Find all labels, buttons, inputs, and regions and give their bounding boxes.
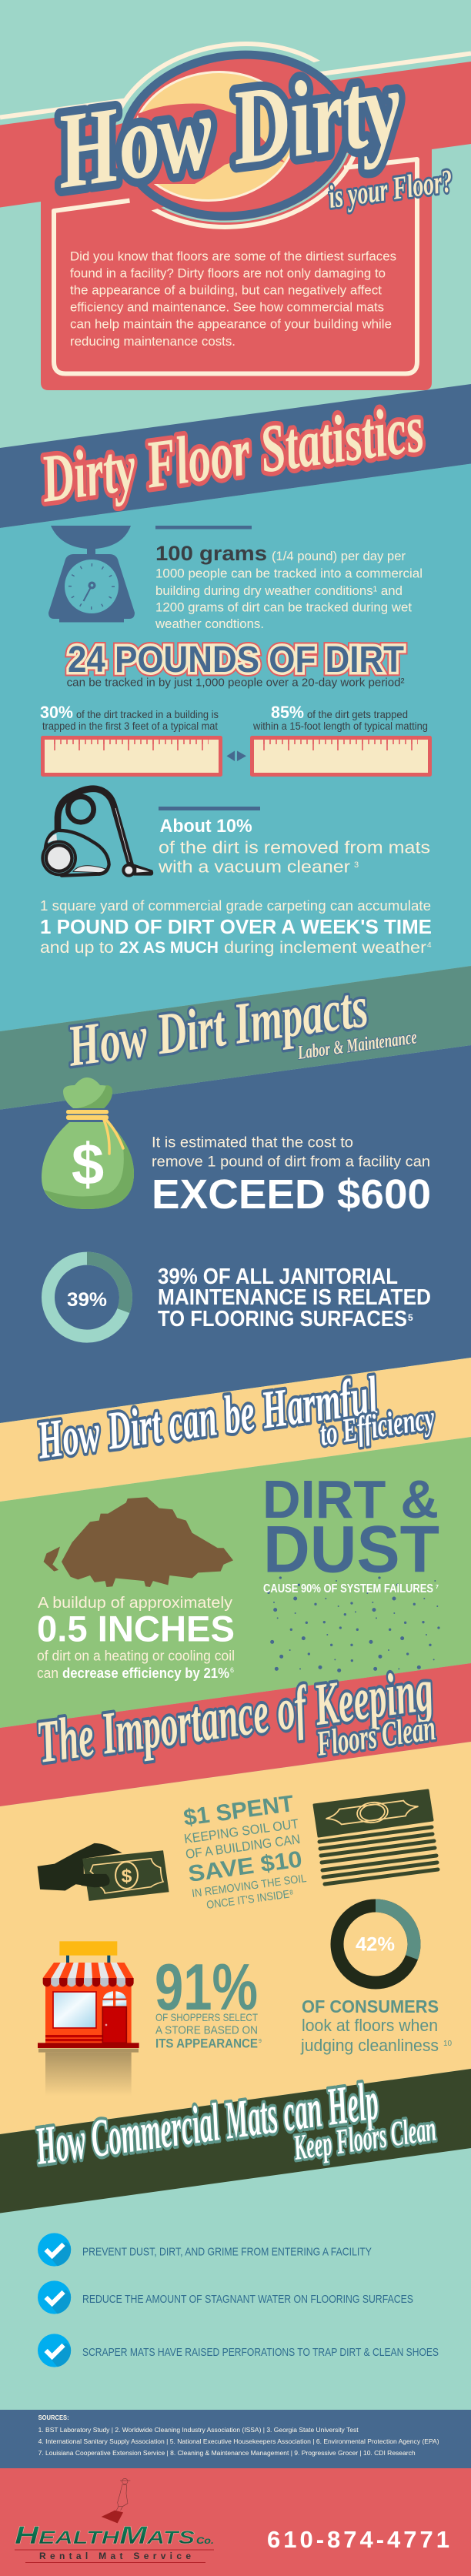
stat: about 10%: 3 <box>354 860 359 870</box>
phone number: 610-874-4771 <box>267 2526 449 2553</box>
stat: of consumers: judging cleanliness <box>300 2036 439 2055</box>
panel: harmful to efficiency <box>0 1358 471 1728</box>
icon: check 3 <box>38 2334 71 2367</box>
stat: 85% <box>252 703 428 732</box>
sources text: 7. Louisiana Cooperative Extension Service | 8. Cleaning & Maintenance Management | 9. Progressive Grocer | 10. CDI Research <box>38 2450 416 2457</box>
stat: 24 pounds of dirt: 24 POUNDS OF DIRT <box>68 640 404 680</box>
stat: 100 grams: weather condtions. <box>155 617 264 631</box>
stat: carpeting <box>40 898 432 957</box>
arrows between rulers <box>226 751 246 761</box>
icon: money bag: $ <box>72 1132 104 1198</box>
caption: 24 pounds: can be tracked in by just 1,000 people over a 20-day work period² <box>67 677 405 690</box>
sources text: SOURCES: <box>38 2414 69 2421</box>
icon: hand holding dollar: $ <box>122 1866 132 1886</box>
stat: carpeting: 4 <box>427 941 432 950</box>
intro text <box>70 249 396 349</box>
sources text: 1. BST Laboratory Study | 2. Worldwide Cleaning Industry Association (ISSA) | 3. Georgia State University Test <box>38 2427 359 2434</box>
stat: 30% <box>40 703 219 732</box>
logo: HealthMats: Co. <box>196 2535 214 2546</box>
sources text <box>38 2414 439 2457</box>
heading: dirt & dust <box>262 1469 439 1587</box>
stat: carpeting: and up to <box>40 939 114 957</box>
stat: $1 spent: KEEPING SOIL OUT <box>183 1816 299 1846</box>
stat: 0.5 inches: 6 <box>230 1666 234 1674</box>
panel: how commercial mats can help <box>0 2069 471 2410</box>
emblem <box>115 42 356 229</box>
logo: HealthMats <box>15 2478 214 2563</box>
navy heading band <box>0 384 471 528</box>
stat: 100 grams: 1000 people can be tracked into a commercial <box>155 567 423 581</box>
check item 3 <box>38 2334 439 2367</box>
panel: sources <box>0 2410 471 2468</box>
stat: 91%: OF SHOPPERS SELECT <box>155 2011 258 2023</box>
caption: 90% system failures: 7 <box>436 1585 439 1590</box>
accent bar <box>159 807 260 810</box>
stat: 30%: 30% <box>40 703 73 722</box>
red ribbon and intro box <box>0 62 471 390</box>
stat: 24 pounds of dirt: 24 POUNDS OF DIRT <box>68 640 404 680</box>
stat: 100 grams: (1/4 pound) per day per <box>272 550 406 563</box>
panel: dirty floor statistics <box>0 384 471 1031</box>
intro text: efficiency and maintenance. See how commercial mats <box>70 300 384 314</box>
stat: 0.5 inches: can <box>37 1666 58 1681</box>
stat: 91%: 91% <box>155 1951 258 2024</box>
stat: 39% janitorial: MAINTENANCE IS RELATED <box>158 1285 431 1310</box>
cream ribbon line <box>0 54 471 117</box>
stat: about 10%: About 10% <box>160 816 252 837</box>
stat: $1 spent: OF A BUILDING CAN <box>185 1832 301 1862</box>
stat: of consumers: 10 <box>443 2040 453 2048</box>
check item 1: PREVENT DUST, DIRT, AND GRIME FROM ENTERING A FACILITY <box>82 2246 372 2258</box>
stat: $1 spent: IN REMOVING THE SOIL <box>191 1873 307 1900</box>
teal section background <box>0 463 471 1031</box>
check item 2: REDUCE THE AMOUNT OF STAGNANT WATER ON FLOORING SURFACES <box>82 2294 413 2306</box>
icon: dust particles <box>269 1578 439 1670</box>
red heading band <box>0 1663 471 1806</box>
heading: dirt & dust: DIRT & <box>262 1469 439 1529</box>
intro text: reducing maintenance costs. <box>70 335 236 349</box>
chart: 42% donut <box>337 1906 414 1983</box>
stat: 0.5 inches: A buildup of approximately <box>38 1594 233 1612</box>
stat: 85%: within a 15-foot length of typical matting <box>252 720 428 732</box>
stat: 100 grams <box>155 542 423 631</box>
stat: 91% <box>155 1951 262 2050</box>
ruler: right <box>252 737 429 774</box>
dark olive heading band <box>0 2069 471 2213</box>
sources text: 4. International Sanitary Supply Association | 5. National Executive Housekeepers Association | 6. Environmental Protection Agency (EPA) <box>38 2438 439 2445</box>
yellow heading band <box>0 1358 471 1502</box>
ruler: left <box>43 737 220 774</box>
stat: 91%: ITS APPEARANCE <box>155 2036 258 2050</box>
stat: exceed $600 <box>152 1135 431 1218</box>
stat: 100 grams: building during dry weather conditions¹ and <box>155 584 403 598</box>
stat: about 10%: of the dirt is removed from mats <box>159 838 430 857</box>
stat: 39% janitorial: 5 <box>408 1312 413 1323</box>
stat: 91%: A STORE BASED ON <box>155 2024 258 2037</box>
stat: 39% janitorial: 39% OF ALL JANITORIAL <box>158 1265 398 1289</box>
icon: stack of bills <box>314 1790 438 1884</box>
stat: 100 grams: 100 grams <box>155 542 267 565</box>
icon: check 2 <box>38 2280 71 2314</box>
chart: 39% donut: 39% <box>67 1289 107 1311</box>
panel: how dirt impacts <box>0 966 471 1423</box>
stat: carpeting: 2X AS MUCH <box>119 939 219 957</box>
stat: exceed $600: remove 1 pound of dirt from a facility can <box>152 1154 430 1170</box>
check item 1 <box>38 2233 372 2267</box>
accent bar <box>155 526 252 530</box>
intro text: the appearance of a building, but can negatively affect <box>70 284 382 298</box>
check item 2 <box>38 2280 413 2314</box>
stat: $1 spent: $1 SPENT <box>182 1791 296 1831</box>
stat: $1 spent: ONCE IT'S INSIDE⁸ <box>205 1888 295 1912</box>
stat: of consumers <box>300 1996 453 2055</box>
icon: figure on mat <box>102 2478 130 2523</box>
stat: 30%: trapped in the first 3 feet of a typical mat <box>42 720 218 732</box>
stat: 30%: of the dirt tracked in a building is <box>76 708 219 720</box>
subheading: Labor & Maintenance: Labor & Maintenance <box>296 1027 418 1064</box>
stat: 0.5 inches: 0.5 INCHES <box>37 1609 235 1649</box>
stat: 85%: 85% <box>271 703 304 722</box>
stat: exceed $600: It is estimated that the cost to <box>152 1135 353 1151</box>
logo: HealthMats: H EALTH M ATS <box>15 2521 195 2549</box>
stat: about 10% <box>158 816 430 876</box>
intro text: found in a facility? Dirty floors are not only damaging to <box>70 267 386 281</box>
panel: hero <box>0 28 471 390</box>
stat: 0.5 inches: of dirt on a heating or cooling coil <box>37 1649 235 1664</box>
caption: 90% system failures: CAUSE 90% OF SYSTEM FAILURES <box>263 1582 433 1595</box>
stat: carpeting: during inclement weather <box>224 939 426 957</box>
heading: dirt & dust: DUST <box>263 1513 439 1587</box>
mint section background <box>0 2148 471 2410</box>
logo: HealthMats: Rental Mat Service <box>39 2551 191 2561</box>
stat: 0.5 inches <box>37 1594 235 1681</box>
icon: storefront <box>38 1941 139 2096</box>
inner cream frame <box>54 159 417 374</box>
stat: 0.5 inches: decrease efficiency by 21% <box>62 1666 229 1681</box>
stat: carpeting: 1 POUND OF DIRT OVER A WEEK'S TIME <box>40 915 432 938</box>
chart: 42% donut: 42% <box>356 1933 395 1955</box>
stat: exceed $600: EXCEED $600 <box>152 1171 431 1218</box>
stat: 85%: of the dirt gets trapped <box>307 708 408 720</box>
stat: 100 grams: 1200 grams of dirt can be tracked during wet <box>155 600 412 614</box>
stat: carpeting: 1 square yard of commercial grade carpeting can accumulate <box>40 898 431 914</box>
icon: check 1 <box>38 2233 71 2267</box>
stat: 24 pounds of dirt: 24 POUNDS OF DIRT <box>68 640 404 680</box>
icon: kitchen scale <box>48 526 135 622</box>
panel: importance of keeping floors clean <box>0 1656 471 2134</box>
grey-green heading band <box>0 966 471 1110</box>
stat: of consumers: OF CONSUMERS <box>302 1996 439 2016</box>
stat: 39% janitorial: TO FLOORING SURFACES <box>158 1307 407 1331</box>
panel: footer <box>0 2468 471 2576</box>
icon: dirt pile <box>44 1497 233 1587</box>
stat: 91%: 9 <box>259 2039 262 2044</box>
stat: of consumers: look at floors when <box>302 2016 438 2035</box>
stat: $1 spent <box>182 1791 307 1912</box>
navy section background <box>0 1045 471 1423</box>
icon: hand holding dollar <box>38 1843 169 1901</box>
intro text: can help maintain the appearance of your building while <box>70 318 392 332</box>
intro text: Did you know that floors are some of the dirtiest surfaces <box>70 249 396 263</box>
icon: vacuum cleaner <box>41 789 153 877</box>
green section background <box>0 1437 471 1728</box>
stat: about 10%: with a vacuum cleaner <box>158 857 350 876</box>
stat: 39% janitorial <box>158 1265 431 1331</box>
stat: $1 spent: SAVE $10 <box>187 1846 304 1887</box>
chart: 39% donut <box>48 1258 126 1336</box>
icon: money bag <box>42 1078 134 1209</box>
yellow section background <box>0 1742 471 2134</box>
